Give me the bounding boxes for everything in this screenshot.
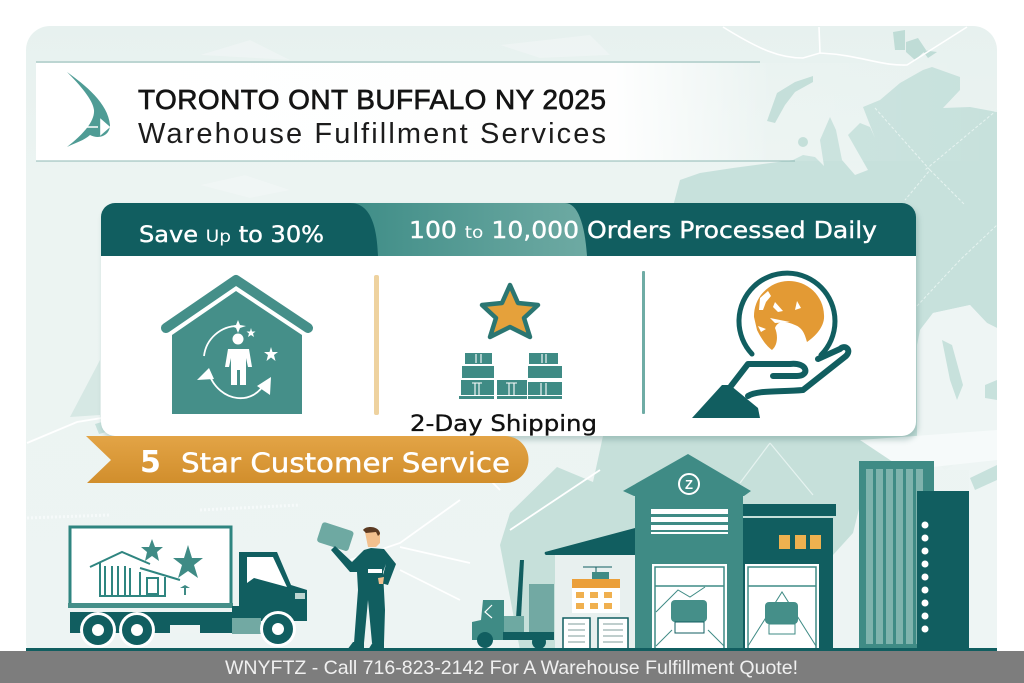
label: save up to 30%: Save Up to 30% [139, 223, 324, 248]
illustration: warehouse main building [623, 454, 751, 650]
illustration: worker with box [316, 522, 396, 650]
title [138, 84, 606, 150]
divider [374, 275, 379, 415]
icon: house with worker [166, 280, 308, 414]
icon: house logo on truck [90, 552, 180, 596]
illustration: warehouse main building: Z [685, 477, 693, 492]
divider [642, 271, 645, 414]
panel: services card [101, 203, 918, 440]
banner: 5 star customer service: Star Customer Service [181, 448, 510, 479]
banner: 5 star customer service [86, 436, 528, 483]
ground line [26, 648, 997, 652]
icon: logo [67, 72, 110, 147]
header bar [101, 203, 916, 256]
illustration: warehouse left wing [545, 528, 635, 650]
header band [36, 62, 1000, 161]
illustration: warehouse right wing [743, 504, 836, 650]
illustration: tower building [859, 461, 969, 650]
title: TORONTO ONT BUFFALO NY 2025 [138, 84, 606, 115]
banner: 5 star customer service: 5 [140, 445, 161, 480]
title: Warehouse Fulfillment Services [138, 118, 606, 150]
illustration: forklift [472, 560, 554, 649]
label: orders processed daily: 100 to 10,000 Orders Processed Daily [409, 218, 877, 244]
illustration: delivery truck [68, 527, 307, 648]
icon: hand holding globe [692, 273, 848, 418]
footer bar [0, 651, 1024, 683]
icon: star over boxes [459, 285, 562, 399]
icon: stars on truck [141, 539, 203, 595]
label: 2-day shipping: 2-Day Shipping [410, 412, 597, 437]
footer bar: WNYFTZ - Call 716-823-2142 For A Warehouse Fulfillment Quote! [225, 657, 798, 679]
